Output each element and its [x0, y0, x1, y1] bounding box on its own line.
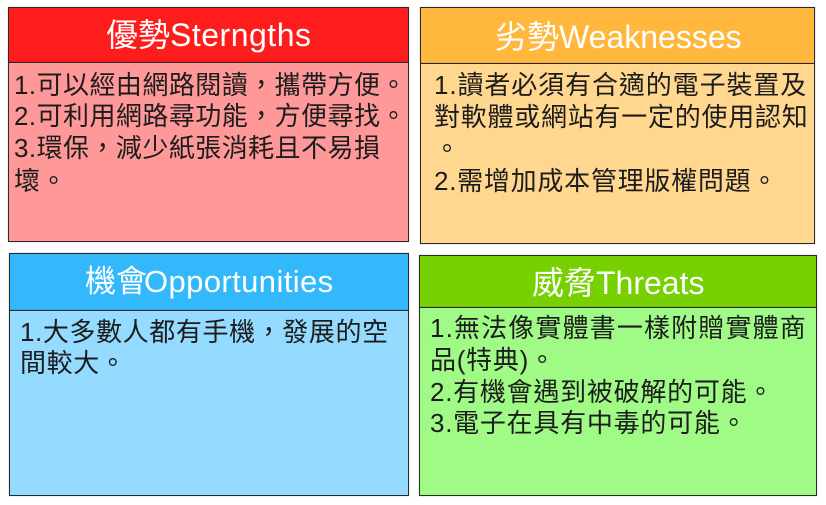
heading: strengths	[8, 7, 409, 63]
text block: threats: 品(特典)。	[430, 345, 556, 375]
text block: threats: 2.有機會遇到被破解的可能。	[430, 377, 774, 407]
heading: weaknesses	[420, 7, 815, 64]
text block: weaknesses: 。	[434, 134, 461, 164]
text block: strengths: 2.可利用網路尋功能，方便尋找。	[14, 101, 407, 131]
text block: threats: 3.電子在具有中毒的可能。	[430, 408, 747, 438]
heading: opportunities	[9, 253, 409, 311]
text block: strengths: 壞。	[14, 166, 67, 196]
text block: threats	[419, 307, 817, 496]
text block: weaknesses	[420, 63, 815, 244]
text block: opportunities	[9, 310, 409, 496]
text block: strengths	[8, 62, 409, 242]
text block: threats: 1.無法像實體書一樣附贈實體商	[430, 313, 807, 343]
heading: threats	[419, 255, 817, 308]
text block: opportunities: 間較大。	[20, 348, 126, 378]
panel: strengths	[7, 6, 410, 242]
panel: threats	[418, 254, 818, 496]
heading: threats: 威脅Threats	[532, 265, 704, 301]
text block: weaknesses: 1.讀者必須有合適的電子裝置及	[434, 70, 807, 100]
text block: weaknesses: 2.需增加成本管理版權問題。	[434, 166, 778, 196]
panel: opportunities	[8, 252, 410, 496]
heading: opportunities: 機會Opportunities	[85, 264, 334, 299]
text block: strengths: 3.環保，減少紙張消耗且不易損	[14, 133, 380, 163]
heading: weaknesses: 劣勢Weaknesses	[495, 19, 742, 55]
text block: weaknesses: 對軟體或網站有一定的使用認知	[434, 102, 809, 132]
text block: opportunities: 1.大多數人都有手機，發展的空	[20, 317, 389, 347]
heading: strengths: 優勢Sterngths	[106, 17, 311, 53]
panel: weaknesses	[419, 6, 816, 244]
text block: strengths: 1.可以經由網路閱讀，攜帶方便。	[14, 70, 407, 100]
